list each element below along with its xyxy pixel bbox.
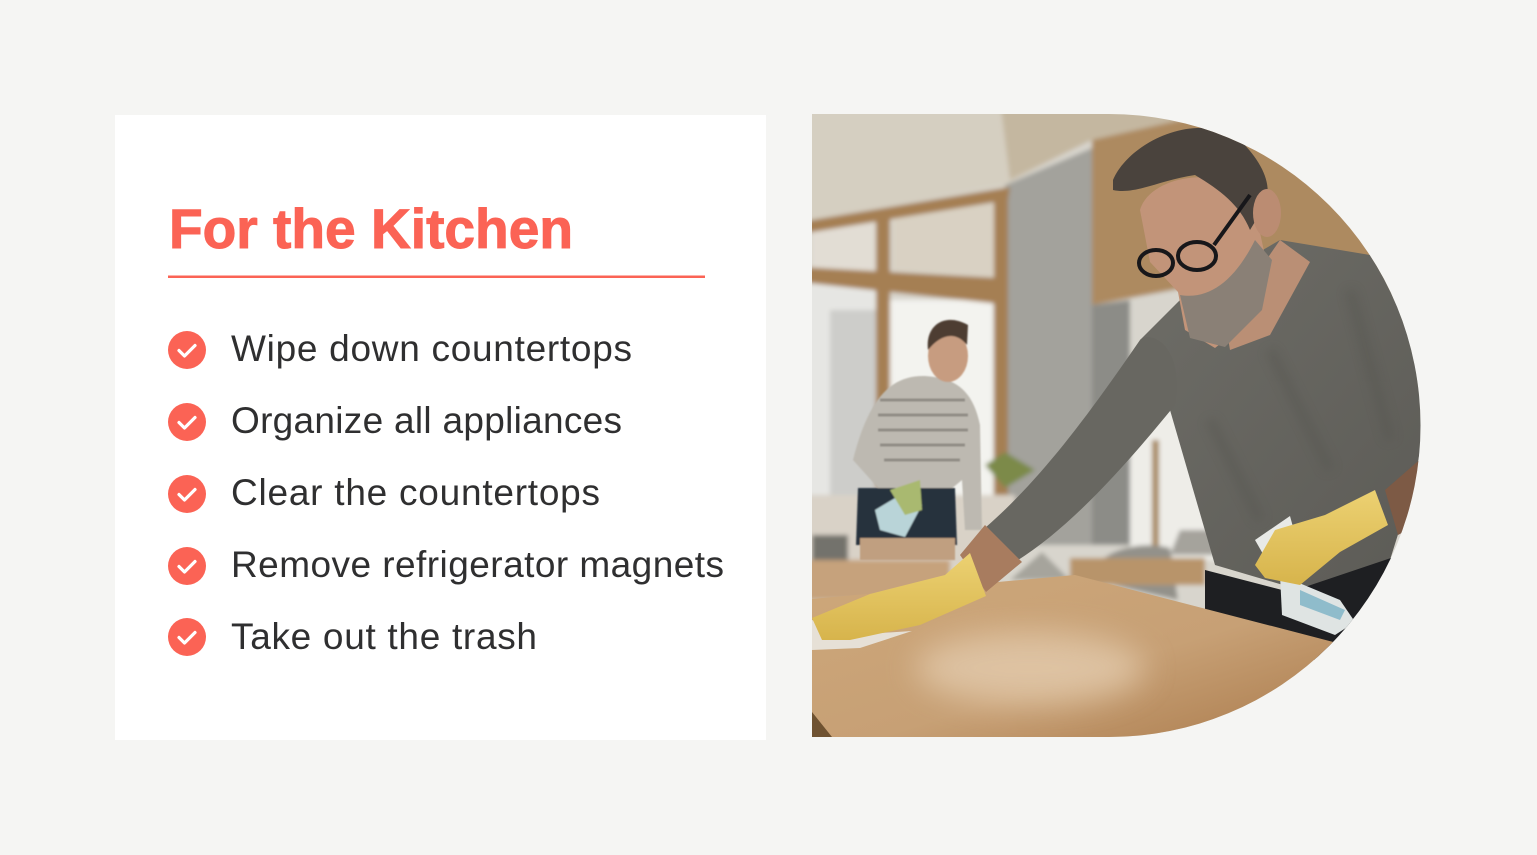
man: beard xyxy=(1180,240,1272,347)
window frame xyxy=(800,187,1010,505)
man: face xyxy=(1140,177,1268,348)
concrete column xyxy=(1005,148,1092,545)
man: ear xyxy=(1253,189,1281,237)
list item: take out the trash: Take out the trash xyxy=(231,616,537,657)
table top xyxy=(800,575,1345,745)
list item: wipe down countertops: Wipe down countertops xyxy=(231,328,632,369)
far wall and doors xyxy=(1128,411,1214,562)
man: rear glove xyxy=(1255,490,1388,585)
list item: remove refrigerator magnets: Remove refrigerator magnets xyxy=(231,544,724,585)
man: spray bottle xyxy=(1255,516,1355,635)
window panes xyxy=(814,224,874,270)
man: front glove xyxy=(812,553,986,640)
man: torso xyxy=(1140,240,1425,590)
man: shirt folds xyxy=(1210,290,1390,520)
list item: clear the countertops: Clear the countertops xyxy=(231,472,600,513)
table edge xyxy=(812,712,832,737)
man: forearm xyxy=(960,525,1022,592)
heading underline xyxy=(168,276,705,278)
man: neck xyxy=(1225,240,1310,350)
plant xyxy=(985,452,1035,488)
man: arm sleeve xyxy=(985,337,1177,565)
photo: man and woman cleaning a table xyxy=(800,100,1440,750)
man: glasses xyxy=(1139,195,1250,276)
chairs xyxy=(812,535,848,560)
man: hair xyxy=(1113,128,1268,230)
heading: For the Kitchen xyxy=(169,197,573,260)
wood wall xyxy=(1092,118,1430,305)
far table xyxy=(800,560,950,600)
man: cloth xyxy=(812,620,912,650)
table highlight xyxy=(915,632,1145,704)
woman xyxy=(853,320,982,560)
panel: checklist card xyxy=(115,115,766,740)
list item: organize all appliances: Organize all appliances xyxy=(231,400,622,441)
man: trousers xyxy=(1205,555,1400,660)
blurred room background xyxy=(800,100,1440,750)
infographic canvas xyxy=(115,114,1420,740)
ceiling xyxy=(812,114,1010,220)
